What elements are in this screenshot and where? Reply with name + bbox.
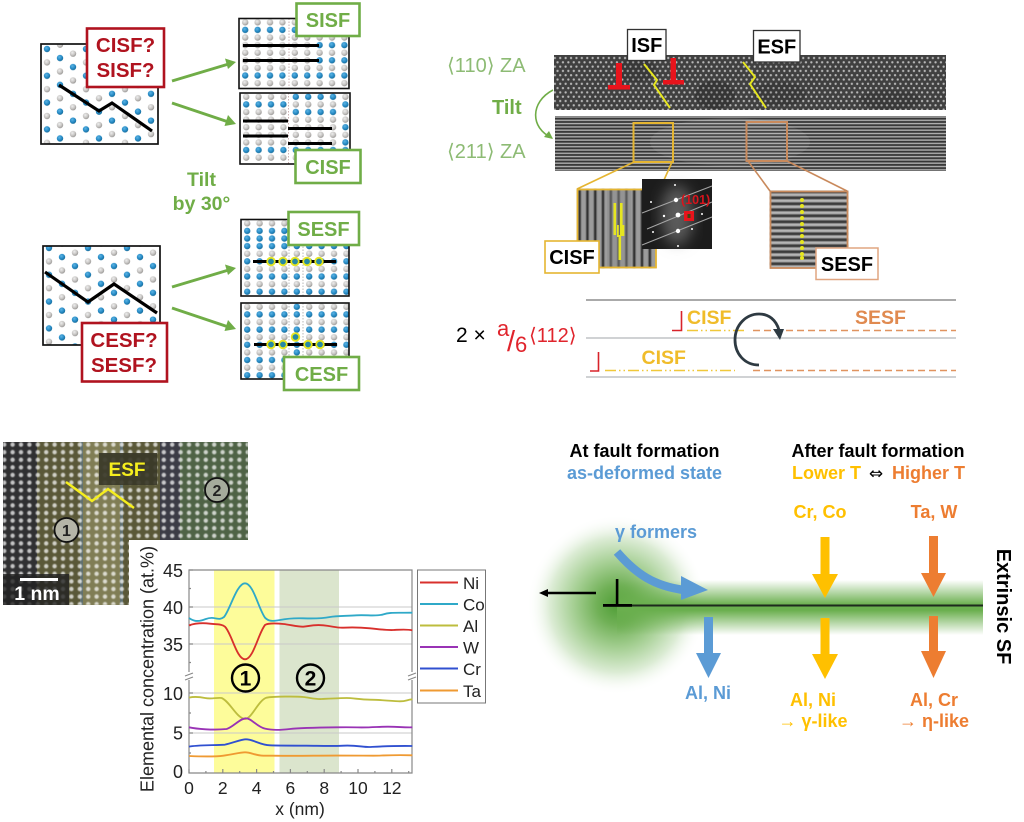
label: SESF: SESF [297,219,350,241]
panel: partial dislocation layer schematic [456,300,956,377]
marker: region 1 [54,518,78,542]
marker: region 1: 1 [62,523,71,540]
panel: lower-left tilt schematic, extrinsic faults [43,212,359,390]
label: Al, Cr eta-like: → η-like [899,711,969,731]
y axis tick labels: 0 [173,762,183,782]
arrow to SESF [172,264,236,287]
label: Al, Ni blue: Al, Ni [685,683,731,703]
x axis tick labels [184,778,402,798]
label: SESF [288,212,359,245]
legend: Ta [463,682,482,701]
label: Al, Cr eta-like [899,690,969,731]
label: ESF: ESF [109,460,145,481]
label: SISF: SISF [306,10,350,32]
icon: dislocation symbol [603,579,632,607]
label: CESF [284,357,359,390]
label: 211 zone axis: ⟨211⟩ ZA [447,141,526,163]
x axis title: x (nm) [275,799,325,819]
formula: 2 x a/6 112: ⟨112⟩ [529,325,576,347]
legend: Ni [463,574,479,593]
label: CESF: CESF [295,364,348,386]
label: Al, Ni gamma-like: Al, Ni [790,690,836,710]
arrow to CESF [172,308,236,331]
label: Extrinsic SF: Extrinsic SF [992,549,1014,664]
y axis tick labels: 35 [163,635,183,655]
heading: after fault formation [792,441,965,484]
label: CISF? SISF? [87,28,164,87]
micrograph: 110 zone axis [554,55,946,110]
label: Tilt with curved arrow [492,90,553,139]
panel: STEM image [3,442,248,605]
arrow: Al, Ni outward yellow [812,618,838,679]
region marker 1 [232,664,259,692]
label: Al, Ni gamma-like [778,690,848,731]
label: CISF inset: CISF [549,247,595,269]
heading: after fault formation: Higher T [892,463,965,483]
label: lower CISF: CISF [642,347,686,369]
inset: FFT diffraction pattern: (101) [681,193,710,207]
x axis tick labels: 12 [382,778,402,798]
label: SESF: SESF [855,307,906,329]
heading: Tilt by 30 degrees [173,169,230,215]
data curves [189,583,412,756]
x axis tick labels: 4 [252,778,262,798]
heading: after fault formation: After fault formation [792,441,964,461]
label: Al, Ni gamma-like: → γ-like [778,711,848,731]
chart axes [185,570,416,773]
marker: region 2 [205,478,229,502]
arrow: glide direction [539,589,596,597]
fault line [66,482,134,508]
arrow: Al, Ni depleted blue [696,617,721,678]
formula: 2 x a/6 112 [456,316,576,358]
label: gamma formers: γ formers [615,522,697,542]
label: Tilt with curved arrow: Tilt [492,97,522,119]
formula: 2 x a/6 112: 6 [515,332,527,357]
label: Ta, W: Ta, W [911,502,957,522]
inset: SESF lattice image [770,191,848,268]
region band 2 [280,570,339,773]
label: ISF: ISF [631,35,662,57]
x axis tick labels: 6 [286,778,295,798]
region marker 1: 1 [240,668,252,690]
label: ESF: ESF [757,36,796,58]
region band 1 [214,570,274,773]
zoom lines: yellow [577,162,672,189]
green solute cloud [527,515,983,695]
panel: TEM micrographs [447,30,946,280]
label: ESF [99,453,157,485]
label: 110 zone axis: ⟨110⟩ ZA [447,55,526,77]
heading: Tilt by 30 degrees: Tilt [187,169,216,191]
arrow to SISF [172,58,236,81]
x axis tick labels: 0 [184,778,194,798]
partial dislocation marks [590,311,682,371]
legend: W [463,638,479,658]
atom panel: unknown extrinsic fault [43,246,160,345]
label: CESF? SESF?: CESF? [90,329,158,352]
arrow: Cr, Co inward [812,537,838,598]
micrograph: atomic resolution with segregation regions [3,442,248,605]
label: Al, Cr eta-like: Al, Cr [910,690,958,710]
label: Cr, Co: Cr, Co [793,502,847,522]
arrow: gamma formers curve [617,552,708,600]
atom panel: unknown intrinsic fault [41,44,158,144]
y axis tick labels [163,561,183,782]
heading: at fault formation: as-deformed state [567,463,722,483]
icon: red dislocation symbols [608,58,684,90]
inset: filtered CISF image [577,189,656,268]
panel: elemental concentration chart [129,540,490,822]
heading: after fault formation: ⇔ [869,464,883,484]
formula: 2 x a/6 112: 2 × [456,324,486,347]
formula: 2 x a/6 112: a [497,316,510,341]
label: ESF [754,30,800,62]
x axis tick labels: 2 [218,778,228,798]
legend: Cr [463,660,481,679]
label: CISF? SISF?: CISF? [96,34,155,57]
label: SESF inset [816,248,878,280]
arrow: Al, Cr outward [921,616,946,678]
stacking fault line [620,604,983,606]
zoom lines: orange [748,161,847,191]
atom panel: SISF [239,18,349,88]
formula: 2 x a/6 112: / [507,326,516,358]
heading: at fault formation [567,441,722,483]
inset: FFT diffraction pattern [642,179,712,249]
panel: top-left tilt schematic, intrinsic faults [41,4,360,183]
legend: Co [463,596,485,614]
y axis tick labels: 40 [163,598,183,618]
label: ISF [628,30,666,60]
micrograph: 211 zone axis [555,116,946,171]
fault lines [605,330,956,370]
atom panel: SESF [241,220,349,296]
atom panel: CISF [240,93,350,164]
heading: after fault formation: Lower T [792,463,861,483]
label: CISF: CISF [305,157,351,179]
y axis tick labels: 5 [173,724,183,744]
panel: segregation mechanism diagram [527,441,1014,731]
arrow: Ta, W inward [921,536,946,597]
arrow to CISF [172,103,236,126]
heading: at fault formation: At fault formation [570,441,720,461]
label: CISF inset [545,241,599,273]
legend [418,570,486,703]
region marker 2 [297,664,324,692]
y axis tick labels: 45 [163,561,183,581]
label: upper CISF: CISF [687,307,732,329]
atom panel: CESF [241,303,349,379]
heading: Tilt by 30 degrees: by 30° [173,193,230,215]
label: CESF? SESF? [82,323,167,382]
scale bar: 1 nm: 1 nm [14,583,60,605]
layer lines [586,300,956,377]
label: CESF? SESF?: SESF? [91,354,157,377]
scale bar: 1 nm [3,574,69,605]
label: SESF inset: SESF [821,254,873,276]
x axis tick labels: 8 [319,778,329,798]
region marker 2: 2 [305,668,316,690]
x axis tick labels: 10 [348,778,368,798]
label: SISF [296,4,360,36]
white chart backing [129,540,490,822]
label: CISF [296,150,360,183]
label: CISF? SISF?: SISF? [96,59,155,82]
arrow: rotation [735,314,784,365]
y axis title: Elemental concentration (at.%) [138,546,158,792]
legend: Al [463,617,478,636]
y axis tick labels: 10 [163,684,183,704]
marker: region 2: 2 [213,483,222,500]
